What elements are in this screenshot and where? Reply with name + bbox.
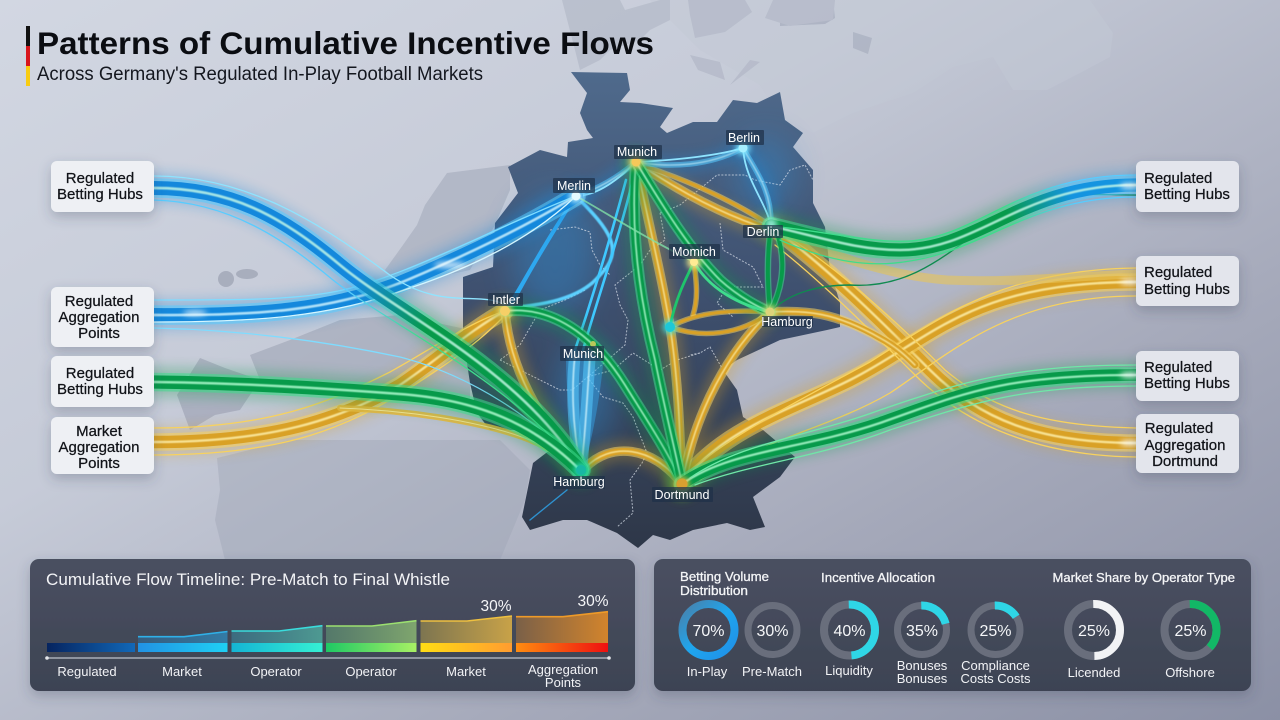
left hub labels <box>51 161 154 474</box>
donut: pre-match 30%: 30% <box>756 623 789 640</box>
flag accent bar <box>26 26 30 86</box>
axis labels: Points <box>545 675 582 690</box>
heading: incentive allocation: Incentive Allocation <box>821 570 935 585</box>
hub: regulated betting hubs 2: Betting Hubs <box>57 381 143 398</box>
donut: bonuses 35%: 35% <box>906 623 938 640</box>
heading: market share: Market Share by Operator Type <box>1052 570 1235 585</box>
hub: regulated betting hubs 1: Regulated <box>66 170 134 187</box>
map: blue glow on land <box>513 137 793 450</box>
flow: Dortmund to right hub green <box>682 365 1136 485</box>
map node labels: Momich <box>672 245 716 259</box>
flows: yellow network <box>154 226 1136 484</box>
hub: regulated aggregation Dortmund: Dortmund <box>1152 453 1218 470</box>
panel heading: Cumulative Flow Timeline: Pre-Match to Final Whistle <box>46 570 450 589</box>
value labels: 30% <box>480 598 512 615</box>
hub: right betting hubs 1: Betting Hubs <box>1144 186 1230 203</box>
hub: regulated aggregation points: Points <box>78 325 120 342</box>
donut: licensed 25%: 25% <box>1078 623 1110 640</box>
donut: compliance costs 25% <box>960 606 1031 686</box>
donut: bonuses 35%: Bonuses <box>897 658 948 673</box>
panel: cumulative flow timeline <box>30 559 635 691</box>
flows: thin green links <box>576 194 1136 327</box>
map: Germany <box>463 72 840 548</box>
title block <box>26 25 654 86</box>
donut: bonuses 35%: Bonuses <box>897 671 948 686</box>
value labels: 30% <box>577 593 609 610</box>
hub: regulated aggregation points <box>51 287 154 347</box>
timeline axis <box>45 656 611 660</box>
hub: regulated aggregation Dortmund: Aggregation <box>1145 437 1225 454</box>
axis labels <box>57 662 598 690</box>
axis labels: Operator <box>250 664 302 679</box>
flows: blue from Munich to Hamburg <box>566 355 604 470</box>
donut: offshore 25%: Offshore <box>1165 665 1215 680</box>
map node labels: Intler <box>492 293 520 307</box>
donut: pre-match 30%: Pre-Match <box>742 664 802 679</box>
hub: regulated betting hubs 1: Betting Hubs <box>57 186 143 203</box>
map: region borders <box>500 165 813 527</box>
heading: betting volume distribution: Betting Volume <box>680 569 769 584</box>
map node labels: Hamburg <box>553 475 605 489</box>
hub: market aggregation points: Aggregation <box>59 439 139 456</box>
right hub labels <box>1136 161 1239 473</box>
axis labels: Market <box>162 664 202 679</box>
map node labels: Munich <box>617 145 657 159</box>
flow: left aggregation points to Merlin <box>154 196 581 470</box>
panel: donut metrics <box>654 559 1251 691</box>
hub: right betting hubs 2: Betting Hubs <box>1144 281 1230 298</box>
axis labels: Market <box>446 664 486 679</box>
subtitle: Across Germany's Regulated In-Play Football Markets <box>37 64 483 85</box>
hub: market aggregation points: Market <box>76 423 123 440</box>
flows: blue links on map <box>505 148 771 520</box>
donut: liquidity 40%: 40% <box>833 623 866 640</box>
flows: yellow links on map <box>505 162 915 484</box>
donut: offshore 25% <box>1164 604 1216 680</box>
donut: liquidity 40% <box>824 604 875 678</box>
flows: green links on map <box>505 162 782 484</box>
donut: bonuses 35% <box>897 606 948 686</box>
map node labels <box>488 130 813 502</box>
map nodes <box>498 141 777 491</box>
hub: right betting hubs 2: Regulated <box>1144 264 1212 281</box>
hub: regulated aggregation Dortmund: Regulated <box>1145 420 1213 437</box>
heading: betting volume distribution <box>680 569 769 598</box>
hub: right betting hubs 1: Regulated <box>1144 170 1212 187</box>
flow: left betting hubs to Hamburg <box>154 176 581 470</box>
map node labels: Derlin <box>747 225 779 239</box>
heading: betting volume distribution: Distribution <box>680 583 748 598</box>
donut: compliance costs 25%: Costs Costs <box>960 671 1031 686</box>
flow end glows <box>183 183 1140 446</box>
donut: offshore 25%: 25% <box>1174 623 1207 640</box>
donut: pre-match 30% <box>742 606 802 679</box>
map node labels: Merlin <box>557 179 591 193</box>
hub: regulated aggregation points: Aggregation <box>59 309 139 326</box>
axis labels: Operator <box>345 664 397 679</box>
hub: right betting hubs 3: Regulated <box>1144 359 1212 376</box>
donut: compliance costs 25%: 25% <box>979 623 1012 640</box>
hub: regulated betting hubs 2 <box>51 356 154 407</box>
axis labels: Regulated <box>57 664 117 679</box>
donut: in-play 70% <box>682 604 734 679</box>
hub: right betting hubs 3 <box>1136 351 1239 401</box>
donut: licensed 25% <box>1068 604 1120 680</box>
donut: liquidity 40%: Liquidity <box>825 663 873 678</box>
flows: pale yellow to right hub <box>340 230 1136 468</box>
donut: in-play 70%: In-Play <box>687 664 728 679</box>
stepped area chart <box>47 612 608 652</box>
hub: regulated aggregation points: Regulated <box>65 293 133 310</box>
hub: regulated betting hubs 1 <box>51 161 154 212</box>
value labels <box>480 593 609 615</box>
flow: left betting hubs green <box>154 382 580 470</box>
map node labels: Hamburg <box>761 315 813 329</box>
hub: right betting hubs 1 <box>1136 161 1239 212</box>
donut: in-play 70%: 70% <box>692 623 725 640</box>
map: surrounding landmasses <box>177 0 1113 560</box>
donut: compliance costs 25%: Compliance <box>961 658 1030 673</box>
hub: regulated aggregation Dortmund <box>1136 414 1239 473</box>
axis labels: Aggregation <box>528 662 598 677</box>
donut: licensed 25%: Licended <box>1068 665 1120 680</box>
hub: right betting hubs 3: Betting Hubs <box>1144 375 1230 392</box>
hub: market aggregation points: Points <box>78 455 120 472</box>
title: Patterns of Cumulative Incentive Flows <box>37 25 654 61</box>
map node labels: Berlin <box>728 131 760 145</box>
flow: Derlin to top right hub <box>771 175 1136 264</box>
hub: right betting hubs 2 <box>1136 256 1239 306</box>
map node labels: Munich <box>563 347 603 361</box>
hub: market aggregation points <box>51 417 154 474</box>
hub: regulated betting hubs 2: Regulated <box>66 365 134 382</box>
map node labels: Dortmund <box>655 488 709 502</box>
